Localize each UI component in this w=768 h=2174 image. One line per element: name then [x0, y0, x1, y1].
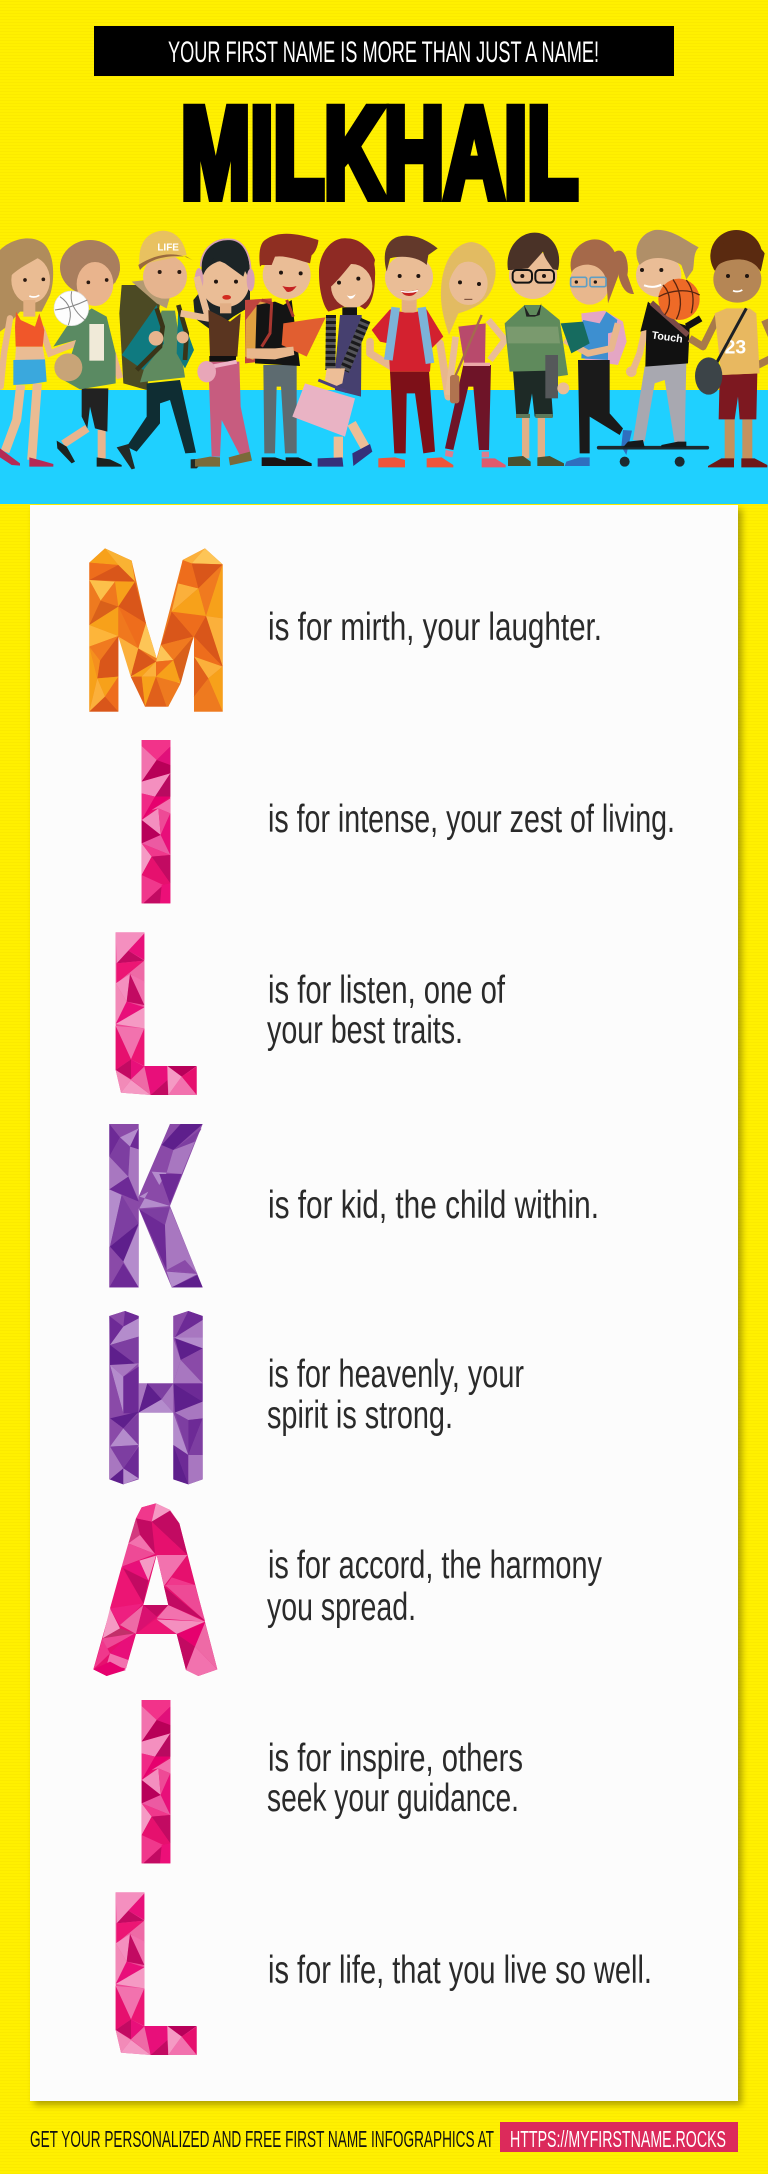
line: M meaning: is for mirth, your laughter.: [268, 606, 602, 649]
letter I second: [142, 1700, 170, 1863]
person: hiker with cap and backpack: [117, 231, 207, 469]
panel: white card: [30, 505, 742, 2105]
line: A meaning: is for accord, the harmony: [268, 1544, 602, 1587]
person: girl in orange top: [0, 238, 77, 467]
letter K: [109, 1124, 203, 1287]
line: A meaning: you spread.: [267, 1586, 416, 1629]
letter H: [109, 1311, 203, 1484]
line: L meaning: is for listen, one of: [268, 969, 505, 1012]
person: boy with book: [245, 234, 326, 466]
line: L meaning: [267, 969, 505, 1052]
person: girl with ponytail and tablet: [561, 239, 634, 466]
person: girl with pink bag: [292, 238, 375, 467]
person: boy in tank top with bag: 23: [725, 337, 746, 358]
letter L second: [116, 1892, 197, 2055]
line: H meaning: is for heavenly, your: [268, 1353, 524, 1396]
letter L: [116, 932, 197, 1095]
line: L meaning: your best traits.: [267, 1009, 463, 1052]
line: A meaning: [267, 1544, 602, 1629]
header banner: [94, 26, 674, 76]
person: boy in tank top with bag: [687, 230, 768, 467]
person: girl with volleyball: [53, 240, 122, 467]
line: H meaning: spirit is strong.: [267, 1394, 453, 1437]
letter M: [89, 548, 223, 712]
band: blue floor: [0, 390, 768, 504]
line: H meaning: [267, 1353, 524, 1437]
illustration: group of students: [0, 230, 768, 469]
person: boy on skateboard with basketball: Touch: [651, 329, 683, 346]
letter A: [93, 1503, 217, 1676]
person: hiker with cap and backpack: LIFE: [157, 243, 179, 254]
line: I second meaning: [267, 1737, 523, 1820]
person: blonde girl with shoulder bag: [441, 242, 506, 467]
person: boy on skateboard with basketball: [599, 230, 707, 467]
line: I second meaning: is for inspire, others: [268, 1737, 523, 1780]
line: I second meaning: seek your guidance.: [267, 1777, 519, 1820]
line: K meaning: is for kid, the child within.: [268, 1184, 599, 1227]
person: boy in red t-shirt: [370, 236, 453, 467]
person: girl with headphones: [181, 239, 255, 467]
letter I: [142, 740, 170, 903]
person: boy with glasses and laptop: [505, 233, 569, 466]
